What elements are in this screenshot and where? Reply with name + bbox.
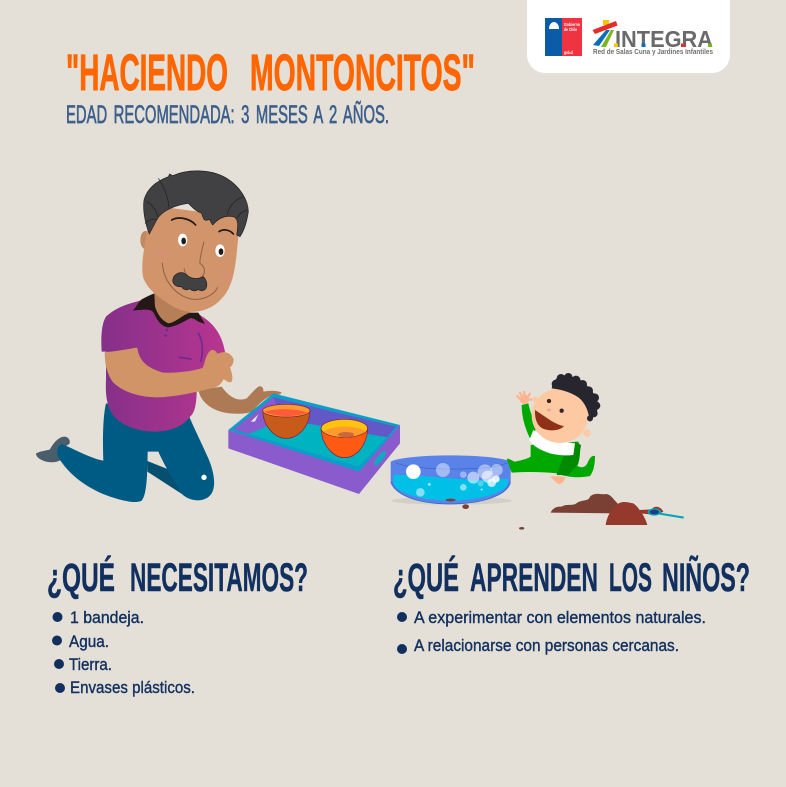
back leg	[147, 461, 185, 496]
heading: what we need: ¿QUÉ	[47, 555, 115, 600]
logo: Integra	[592, 20, 713, 56]
title: "HACIENDO	[66, 44, 228, 101]
near arm	[105, 348, 233, 397]
bubbles	[406, 463, 503, 497]
heading: what we need	[47, 555, 308, 600]
bowl: brown	[263, 404, 310, 438]
heading: what children learn	[393, 554, 750, 600]
bowl: orange	[321, 419, 368, 458]
jeans	[57, 403, 214, 502]
list: learnings	[397, 608, 706, 655]
heading: what children learn: LOS	[609, 556, 652, 600]
heading: what we need: NECESITAMOS?	[130, 556, 308, 600]
face	[142, 207, 238, 312]
title: MONTONCITOS"	[250, 44, 475, 101]
neck	[154, 293, 190, 325]
far arm	[198, 386, 282, 414]
list: learnings: A experimentar con elementos naturales.	[414, 608, 706, 627]
hair	[144, 171, 248, 237]
logo: Gobierno de Chile: gob.cl	[564, 50, 573, 55]
sock	[36, 437, 70, 462]
illustration: tray with two bowls	[228, 393, 400, 494]
knee highlight	[201, 475, 207, 480]
logo: Integra: INTEGRA	[615, 26, 713, 52]
logo panel	[527, 0, 730, 73]
mouth line and nose	[162, 263, 218, 299]
tray outer	[228, 425, 400, 494]
tray inside	[233, 397, 396, 467]
list: materials: Envases plásticos.	[70, 678, 195, 697]
illustration: water basin	[391, 455, 512, 509]
baby ears	[532, 396, 591, 437]
list: materials	[52, 608, 195, 697]
moustache	[173, 273, 207, 291]
eyes and brows	[172, 218, 233, 234]
illustration: kneeling father	[36, 171, 282, 502]
baby head	[532, 388, 588, 443]
logo: Integra: Red de Salas Cuna y Jardines Infantiles	[593, 47, 713, 56]
logo: Gobierno de Chile: de Chile	[564, 27, 577, 32]
logo: Gobierno de Chile: Gobierno	[564, 22, 580, 27]
logo: Gobierno de Chile	[545, 18, 582, 56]
baby foot	[550, 476, 566, 484]
baby sleeve	[522, 403, 538, 438]
list: learnings: A relacionarse con personas cercanas.	[414, 636, 679, 655]
subtitle: recommended age: EDAD RECOMENDADA: 3 MESES A 2 AÑOS.	[66, 100, 389, 129]
list: materials: Agua.	[69, 632, 109, 651]
baby hair	[552, 373, 600, 422]
illustration: laughing baby	[507, 373, 600, 484]
heading: what children learn: APRENDEN	[470, 556, 598, 600]
illustration: dirt piles and spoon	[519, 494, 684, 530]
ear	[140, 231, 150, 249]
list: materials: 1 bandeja.	[70, 608, 144, 627]
baby collar	[529, 430, 575, 455]
collar	[133, 293, 205, 327]
shirt	[101, 301, 225, 432]
baby body	[507, 442, 595, 477]
baby face	[535, 399, 564, 430]
heading: what children learn: ¿QUÉ	[393, 555, 459, 600]
list: materials: Tierra.	[69, 655, 112, 674]
baby hand	[517, 392, 531, 404]
